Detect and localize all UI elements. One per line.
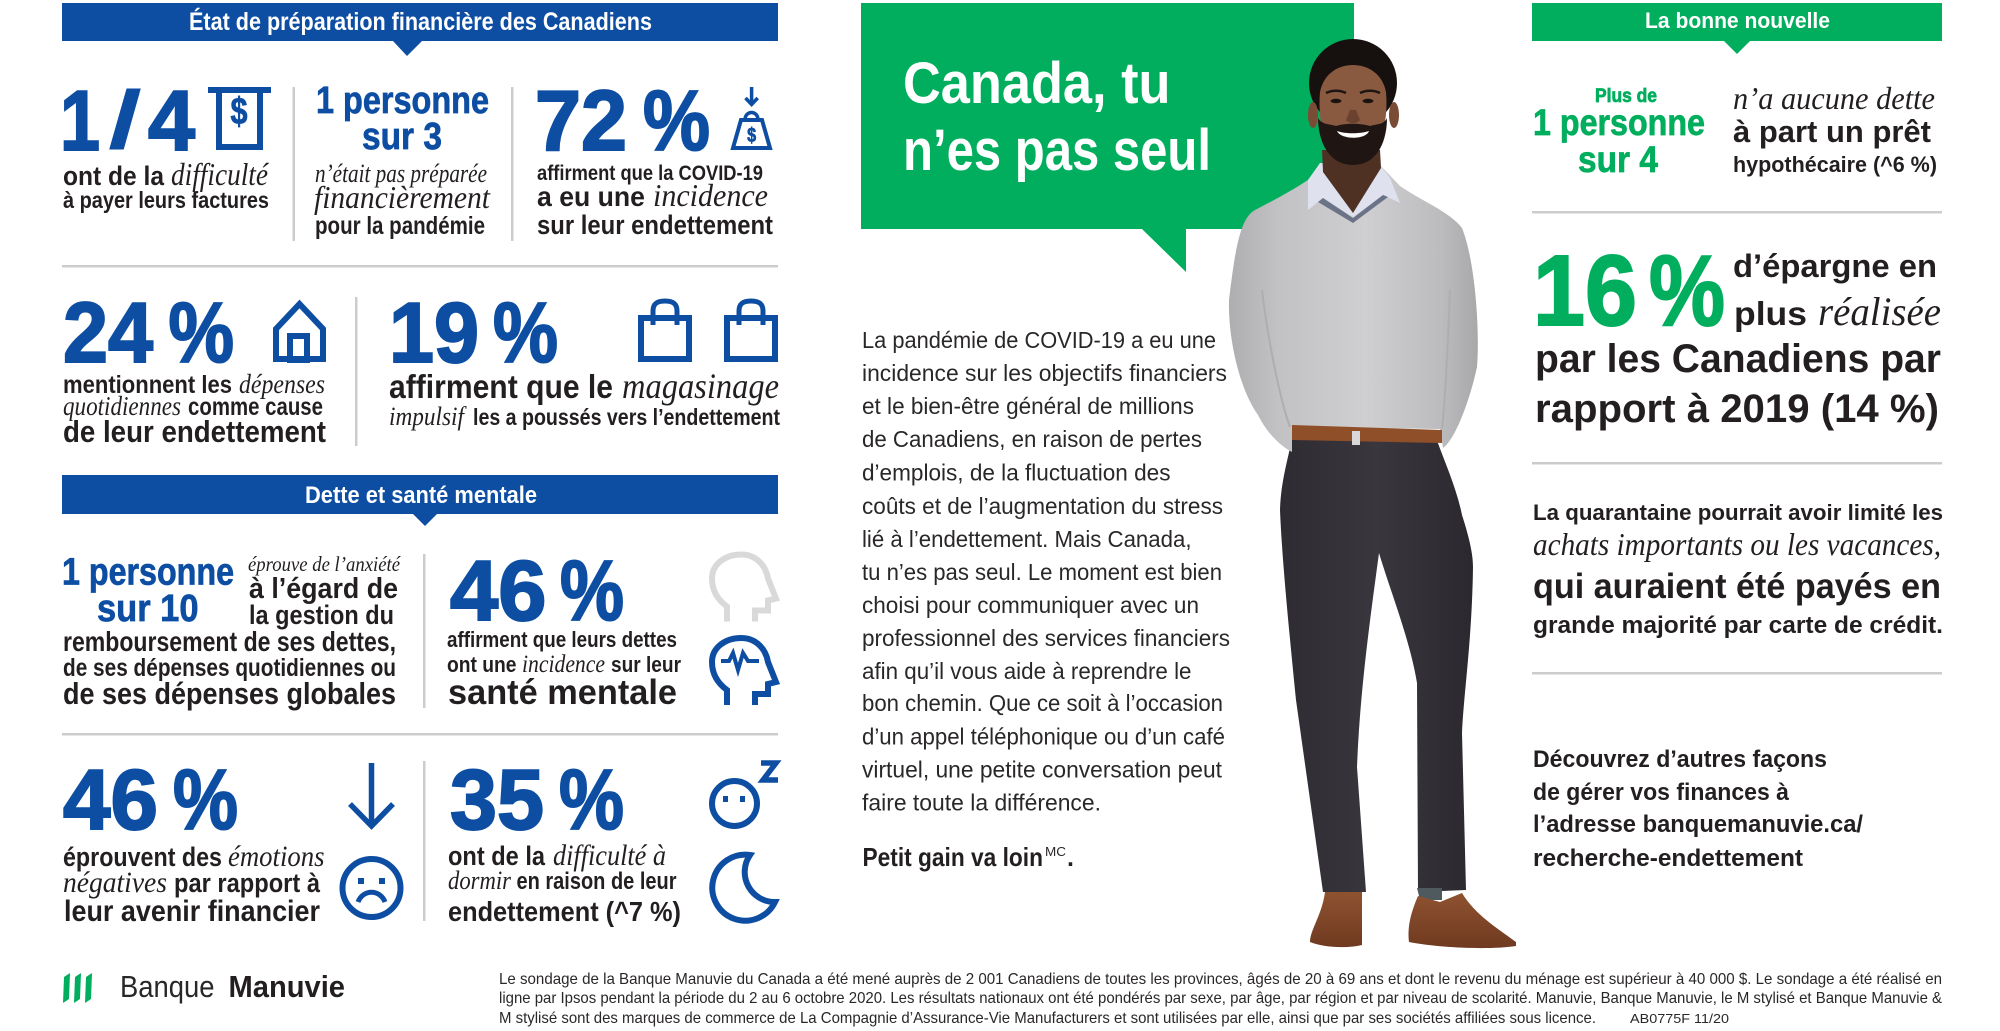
stat: plus de 1 personne sur 4: 1 personne bbox=[1533, 102, 1705, 143]
stat: 16 %: par les Canadiens par bbox=[1535, 337, 1941, 381]
neck and shirt bbox=[1308, 163, 1400, 217]
sweater bbox=[1229, 165, 1478, 452]
body text: MC bbox=[1045, 844, 1066, 859]
icon: down arrow bbox=[350, 763, 393, 826]
stat: plus de 1 personne sur 4: sur 4 bbox=[1578, 139, 1658, 180]
text block: call to action: recherche-endettement bbox=[1533, 845, 1803, 872]
heading banner: préparation financière: État de préparation financière des Canadiens bbox=[189, 7, 652, 36]
stat: 1/4 bbox=[60, 74, 271, 213]
stat: 1 personne sur 10: de ses dépenses globales bbox=[63, 676, 396, 711]
body text: Petit gain va loin bbox=[862, 842, 1043, 872]
stat: 24 %: dépenses bbox=[239, 369, 325, 399]
panel: la bonne nouvelle bbox=[1532, 3, 1943, 872]
heading banner: préparation financière bbox=[62, 3, 778, 56]
body text: choisi pour communiquer avec un bbox=[862, 592, 1199, 618]
stat: 1/4: / bbox=[108, 75, 142, 166]
icon: shopping bag 1 bbox=[641, 301, 689, 359]
stat: 35 % sommeil bbox=[448, 753, 778, 927]
footnote: AB0775F 11/20 bbox=[1630, 1011, 1729, 1026]
stat: 35 % sommeil: 35 bbox=[450, 753, 544, 848]
stat: plus de 1 personne sur 4: à part un prêt bbox=[1733, 114, 1931, 149]
body text: bon chemin. Que ce soit à l’occasion bbox=[862, 690, 1223, 716]
stat: 1/4: 1 bbox=[60, 74, 100, 169]
icon: sad face bbox=[342, 859, 400, 917]
footnote: ligne par Ipsos pendant la période du 2 au 6 octobre 2020. Les résultats nationaux ont été pondérés par sexe, par âge, par région et par niveau de scolarité. Manuvie, Banque Manuvie, le M stylisé et Banque Manuvie & bbox=[499, 990, 1942, 1007]
shoes bbox=[1310, 892, 1362, 947]
text block: quarantaine bbox=[1533, 500, 1943, 639]
body text: professionnel des services financiers bbox=[862, 625, 1230, 651]
body text: virtuel, une petite conversation peut bbox=[862, 756, 1223, 782]
stat: 19 %: magasinage bbox=[622, 366, 779, 406]
stat: 35 % sommeil: difficulté à bbox=[553, 839, 666, 872]
stat: 24 %: mentionnent les bbox=[63, 371, 232, 399]
text block: call to action: de gérer vos finances à bbox=[1533, 779, 1790, 806]
body text: coûts et de l’augmentation du stress bbox=[862, 493, 1223, 519]
stat: 46 % santé mentale: santé mentale bbox=[448, 673, 677, 712]
body text: . bbox=[1067, 844, 1074, 872]
stat: 72 % bbox=[535, 74, 773, 240]
stat: 24 %: 24 bbox=[63, 286, 153, 381]
icon: bill: $ bbox=[230, 91, 248, 133]
stat: 1/4: à payer leurs factures bbox=[63, 187, 269, 213]
body text: La pandémie de COVID-19 a eu une bbox=[862, 327, 1216, 353]
heading banner: la bonne nouvelle: La bonne nouvelle bbox=[1645, 8, 1830, 33]
body text bbox=[862, 327, 1230, 872]
stat: 1 personne sur 3: financièrement bbox=[314, 179, 491, 215]
head bbox=[1309, 39, 1397, 127]
stat: 1 personne sur 3: 1 personne bbox=[316, 80, 489, 122]
stat: 24 %: de leur endettement bbox=[63, 414, 326, 449]
text block: quarantaine: La quarantaine pourrait avoir limité les bbox=[1533, 500, 1943, 525]
stat: 46 % santé mentale: sur leur bbox=[611, 652, 681, 677]
stat: 35 % sommeil: endettement (^7 %) bbox=[448, 896, 681, 927]
stat: 16 %: plus bbox=[1734, 295, 1807, 332]
body text: d’un appel téléphonique ou d’un café bbox=[862, 724, 1225, 750]
body text: tu n’es pas seul. Le moment est bien bbox=[862, 559, 1222, 585]
stat: 46 % santé mentale: incidence bbox=[522, 651, 605, 678]
stat: plus de 1 personne sur 4: Plus de bbox=[1595, 86, 1657, 107]
icon: money bag with arrow: $ bbox=[747, 125, 756, 147]
text block: quarantaine: grande majorité par carte de crédit. bbox=[1533, 612, 1943, 639]
stat: 1 personne sur 10: la gestion du bbox=[249, 600, 394, 630]
panel: état de préparation financière bbox=[60, 3, 780, 449]
text block: call to action: l’adresse banquemanuvie.ca/ bbox=[1533, 811, 1863, 838]
stat: 46 % émotions négatives: éprouvent des bbox=[63, 842, 222, 872]
body text: incidence sur les objectifs financiers bbox=[862, 360, 1227, 386]
footnote: M stylisé sont des marques de commerce de La Compagnie d’Assurance-Vie Manufacturers et sont utilisées par elle, ainsi que par ses sociétés affiliées sous licence. bbox=[499, 1010, 1596, 1027]
stat: 35 % sommeil: en raison de leur bbox=[516, 868, 676, 895]
stat: plus de 1 personne sur 4: hypothécaire (^6 %) bbox=[1733, 152, 1937, 177]
stat: 1 personne sur 10: 1 personne bbox=[62, 552, 234, 594]
text block: quarantaine: qui auraient été payés en bbox=[1533, 567, 1941, 606]
stat: 1/4: ont de la bbox=[63, 161, 165, 191]
stat: 72 %: a eu une bbox=[537, 181, 645, 212]
heading banner: dette et santé mentale: Dette et santé mentale bbox=[305, 482, 537, 509]
stat: 19 %: affirment que le bbox=[389, 368, 613, 405]
logo: Banque Manuvie: Banque bbox=[120, 969, 214, 1004]
trousers bbox=[1280, 438, 1473, 892]
body text: de Canadiens, en raison de pertes bbox=[862, 426, 1202, 452]
stat: 1 personne sur 10: de ses dépenses quotidiennes ou bbox=[63, 654, 396, 682]
text block: call to action bbox=[1533, 746, 1863, 872]
stat: 24 %: % bbox=[168, 286, 234, 381]
icon: money bag with arrow bbox=[733, 87, 770, 148]
stat: plus de 1 personne sur 4: n’a aucune dette bbox=[1733, 80, 1935, 116]
icon: moon bbox=[712, 855, 775, 921]
stat: plus de 1 personne sur 4 bbox=[1533, 80, 1937, 180]
stat: 1 personne sur 10 bbox=[62, 552, 401, 711]
stat: 72 %: sur leur endettement bbox=[537, 210, 773, 240]
stat: 16 %: 16 bbox=[1533, 235, 1637, 347]
text block: quarantaine: achats importants ou les vacances, bbox=[1533, 526, 1941, 562]
stat: 16 %: rapport à 2019 (14 %) bbox=[1535, 387, 1939, 431]
speech bubble: Canada, tu n'es pas seul: n’es pas seul bbox=[903, 118, 1211, 183]
body text: faire toute la différence. bbox=[862, 790, 1101, 816]
stat: 19 %: impulsif bbox=[389, 402, 467, 431]
stat: 72 %: % bbox=[643, 74, 710, 169]
stat: 1 personne sur 3: pour la pandémie bbox=[315, 212, 485, 240]
icon: shopping bag 2 bbox=[727, 301, 775, 359]
stat: 19 %: les a poussés vers l’endettement bbox=[473, 404, 780, 430]
speech bubble: Canada, tu n'es pas seul bbox=[861, 3, 1354, 272]
stat: 46 % émotions négatives: émotions bbox=[228, 840, 324, 873]
icon: sleeping face bbox=[712, 763, 778, 826]
icon: house bbox=[276, 304, 323, 360]
stat: 24 %: comme cause bbox=[188, 393, 323, 421]
body text: lié à l’endettement. Mais Canada, bbox=[862, 526, 1192, 552]
text block: call to action: Découvrez d’autres façons bbox=[1533, 746, 1827, 773]
stat: 35 % sommeil: % bbox=[559, 753, 624, 848]
logo: Banque Manuvie bbox=[63, 969, 345, 1004]
stat: 72 %: 72 bbox=[535, 74, 627, 169]
stat: 72 %: affirment que la COVID-19 bbox=[537, 162, 763, 185]
stat: 46 % émotions négatives: % bbox=[173, 753, 238, 848]
speech bubble: Canada, tu n'es pas seul: Canada, tu bbox=[903, 51, 1170, 116]
stat: 1 personne sur 10: sur 10 bbox=[97, 588, 198, 630]
stat: 16 %: réalisée bbox=[1818, 289, 1941, 334]
logo: Banque Manuvie: Manuvie bbox=[228, 969, 345, 1004]
stat: 46 % santé mentale: ont une bbox=[447, 652, 516, 677]
stat: 16 % bbox=[1533, 235, 1941, 431]
photo: smiling man bbox=[1229, 39, 1516, 948]
stat: 19 %: 19 bbox=[389, 286, 479, 381]
stat: 35 % sommeil: dormir bbox=[448, 866, 512, 895]
stat: 1 personne sur 10: à l’égard de bbox=[249, 573, 398, 605]
icon: bill bbox=[208, 87, 271, 147]
stat: 46 % émotions négatives: négatives bbox=[63, 866, 167, 899]
sock bbox=[1417, 888, 1442, 900]
stat: 1 personne sur 3: n’était pas préparée bbox=[315, 159, 487, 188]
stat: 72 %: incidence bbox=[653, 177, 768, 213]
stat: 1 personne sur 10: éprouve de l’anxiété bbox=[248, 552, 401, 576]
stat: 46 % santé mentale: % bbox=[560, 544, 624, 639]
stat: 46 % émotions négatives: 46 bbox=[63, 753, 158, 848]
body text: et le bien-être général de millions bbox=[862, 393, 1194, 419]
stat: 24 %: quotidiennes bbox=[63, 391, 181, 421]
panel: dette et santé mentale bbox=[62, 475, 778, 928]
body text: afin qu’il vous aide à reprendre le bbox=[862, 658, 1192, 684]
footnote: Le sondage de la Banque Manuvie du Canada a été mené auprès de 2 001 Canadiens de toutes les provinces, âgés de 20 à 69 ans et dont le revenu du ménage est supérieur à 40 000 $. Le sondage a été réalisé en bbox=[499, 971, 1942, 988]
stat: 1 personne sur 3: sur 3 bbox=[362, 116, 442, 158]
icon: head with pulse bbox=[712, 638, 776, 705]
stat: 46 % émotions négatives: leur avenir financier bbox=[64, 895, 320, 928]
stat: 24 % bbox=[63, 286, 326, 449]
stat: 19 %: % bbox=[493, 286, 558, 381]
stat: 46 % émotions négatives bbox=[63, 753, 400, 928]
stat: 19 % bbox=[389, 286, 780, 431]
stat: 46 % santé mentale bbox=[447, 544, 776, 712]
footnote bbox=[499, 971, 1942, 1027]
stat: 46 % santé mentale: 46 bbox=[450, 544, 546, 639]
stat: 1 personne sur 3 bbox=[314, 80, 491, 240]
heading banner: dette et santé mentale bbox=[62, 475, 778, 526]
body text: d’emplois, de la fluctuation des bbox=[862, 460, 1170, 486]
stat: 35 % sommeil: ont de la bbox=[448, 841, 546, 871]
stat: 1/4: difficulté bbox=[171, 156, 270, 192]
stat: 1 personne sur 10: remboursement de ses dettes, bbox=[63, 626, 396, 657]
stat: 46 % santé mentale: affirment que leurs dettes bbox=[447, 627, 677, 652]
stat: 46 % émotions négatives: par rapport à bbox=[174, 868, 321, 898]
icon: head outline grey bbox=[712, 554, 776, 622]
stat: 16 %: d’épargne en bbox=[1733, 248, 1937, 284]
heading banner: la bonne nouvelle bbox=[1532, 3, 1942, 54]
stat: 1/4: 4 bbox=[148, 74, 195, 169]
belt bbox=[1292, 425, 1442, 443]
stat: 16 %: % bbox=[1649, 235, 1725, 347]
